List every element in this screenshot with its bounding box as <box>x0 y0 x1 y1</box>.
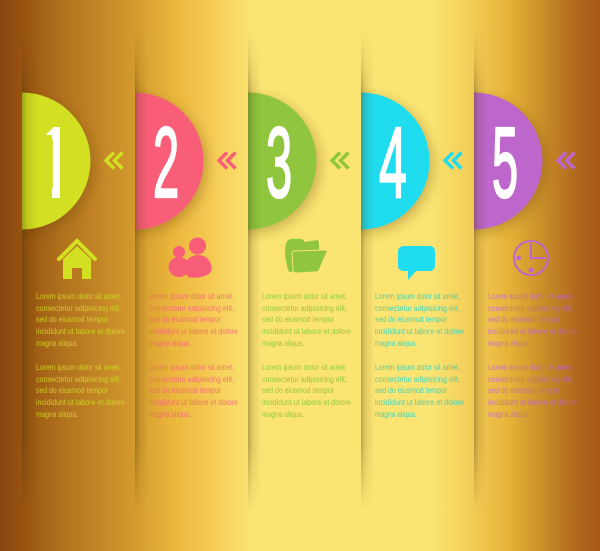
panel: step 5 <box>474 92 577 418</box>
text block 5: sed do eiusmod tempor <box>488 315 560 324</box>
text block 5: incididunt ut labore et dolore <box>488 398 577 407</box>
arrow: chevrons 4 <box>445 152 462 168</box>
text block 3: magna aliqua. <box>262 339 304 348</box>
text block 1: sed do eiusmod tempor <box>36 386 108 395</box>
badge: number 1: 1 <box>36 108 75 219</box>
text block 5 <box>488 292 577 419</box>
text block 1: incididunt ut labore et dolore <box>36 327 125 336</box>
text block 3 <box>262 292 351 419</box>
arrow: chevrons 5 <box>558 152 574 168</box>
panel: step 2 <box>135 92 238 418</box>
badge: number 5: 5 <box>492 106 518 219</box>
text block 3: magna aliqua. <box>262 410 304 419</box>
column edge shadows <box>22 30 487 510</box>
badge: number 2 <box>135 92 212 238</box>
badge: number 1 <box>22 92 98 234</box>
text block 4: incididunt ut labore et dolore <box>375 327 464 336</box>
text block 2: magna aliqua. <box>149 410 191 419</box>
panel: step 4 <box>361 92 464 418</box>
text block 2 <box>149 292 238 419</box>
text block 2: consectetur adipisicing elit, <box>149 304 234 313</box>
text block 1: incididunt ut labore et dolore <box>36 398 125 407</box>
text block 2: Lorem ipsum dolor sit amet, <box>149 292 234 301</box>
badge: number 3: 3 <box>266 106 292 219</box>
text block 5: consectetur adipisicing elit, <box>488 304 573 313</box>
text block 1: consectetur adipisicing elit, <box>36 304 121 313</box>
panel: step 3 <box>248 92 351 418</box>
text block 5: magna aliqua. <box>488 339 530 348</box>
text block 3: consectetur adipisicing elit, <box>262 304 347 313</box>
text block 1: Lorem ipsum dolor sit amet, <box>36 292 121 301</box>
icon: people <box>168 238 211 278</box>
text block 2: Lorem ipsum dolor sit amet, <box>149 363 234 372</box>
text block 4: Lorem ipsum dolor sit amet, <box>375 292 460 301</box>
text block 2: sed do eiusmod tempor <box>149 386 221 395</box>
arrow: chevrons 3 <box>332 152 348 168</box>
text block 2: consectetur adipisicing elit, <box>149 375 234 384</box>
text block 5: incididunt ut labore et dolore <box>488 327 577 336</box>
text block 4: magna aliqua. <box>375 339 417 348</box>
badge: number 4 <box>361 92 438 238</box>
text block 1: Lorem ipsum dolor sit amet, <box>36 363 121 372</box>
text block 4: magna aliqua. <box>375 410 417 419</box>
text block 2: incididunt ut labore et dolore <box>149 327 238 336</box>
text block 4: consectetur adipisicing elit, <box>375 375 460 384</box>
text block 2: incididunt ut labore et dolore <box>149 398 238 407</box>
arrow: chevrons 2 <box>219 152 236 168</box>
text block 4: Lorem ipsum dolor sit amet, <box>375 363 460 372</box>
text block 5: Lorem ipsum dolor sit amet, <box>488 292 573 301</box>
badge: number 4: 4 <box>379 106 407 219</box>
text block 5: consectetur adipisicing elit, <box>488 375 573 384</box>
icon: folder <box>285 239 327 273</box>
text block 2: magna aliqua. <box>149 339 191 348</box>
text block 3: incididunt ut labore et dolore <box>262 398 351 407</box>
text block 5: sed do eiusmod tempor <box>488 386 560 395</box>
text block 3: Lorem ipsum dolor sit amet, <box>262 292 347 301</box>
text block 1 <box>36 292 125 419</box>
text block 4: sed do eiusmod tempor <box>375 386 447 395</box>
icon: house <box>59 241 95 279</box>
arrow: chevrons 1 <box>106 152 122 168</box>
panel: step 1 <box>22 92 125 418</box>
badge: number 5 <box>474 92 550 238</box>
badge: number 2: 2 <box>153 106 179 219</box>
text block 3: consectetur adipisicing elit, <box>262 375 347 384</box>
icon: clock <box>514 241 548 275</box>
text block 1: magna aliqua. <box>36 410 78 419</box>
text block 3: Lorem ipsum dolor sit amet, <box>262 363 347 372</box>
text block 4: incididunt ut labore et dolore <box>375 398 464 407</box>
text block 1: sed do eiusmod tempor <box>36 315 108 324</box>
text block 3: sed do eiusmod tempor <box>262 386 334 395</box>
text block 4: consectetur adipisicing elit, <box>375 304 460 313</box>
text block 4 <box>375 292 464 419</box>
text block 1: consectetur adipisicing elit, <box>36 375 121 384</box>
icon: speech bubble <box>398 246 435 280</box>
text block 1: magna aliqua. <box>36 339 78 348</box>
text block 3: incididunt ut labore et dolore <box>262 327 351 336</box>
text block 4: sed do eiusmod tempor <box>375 315 447 324</box>
badge: number 3 <box>248 92 326 238</box>
text block 5: magna aliqua. <box>488 410 530 419</box>
text block 3: sed do eiusmod tempor <box>262 315 334 324</box>
text block 5: Lorem ipsum dolor sit amet, <box>488 363 573 372</box>
text block 2: sed do eiusmod tempor <box>149 315 221 324</box>
